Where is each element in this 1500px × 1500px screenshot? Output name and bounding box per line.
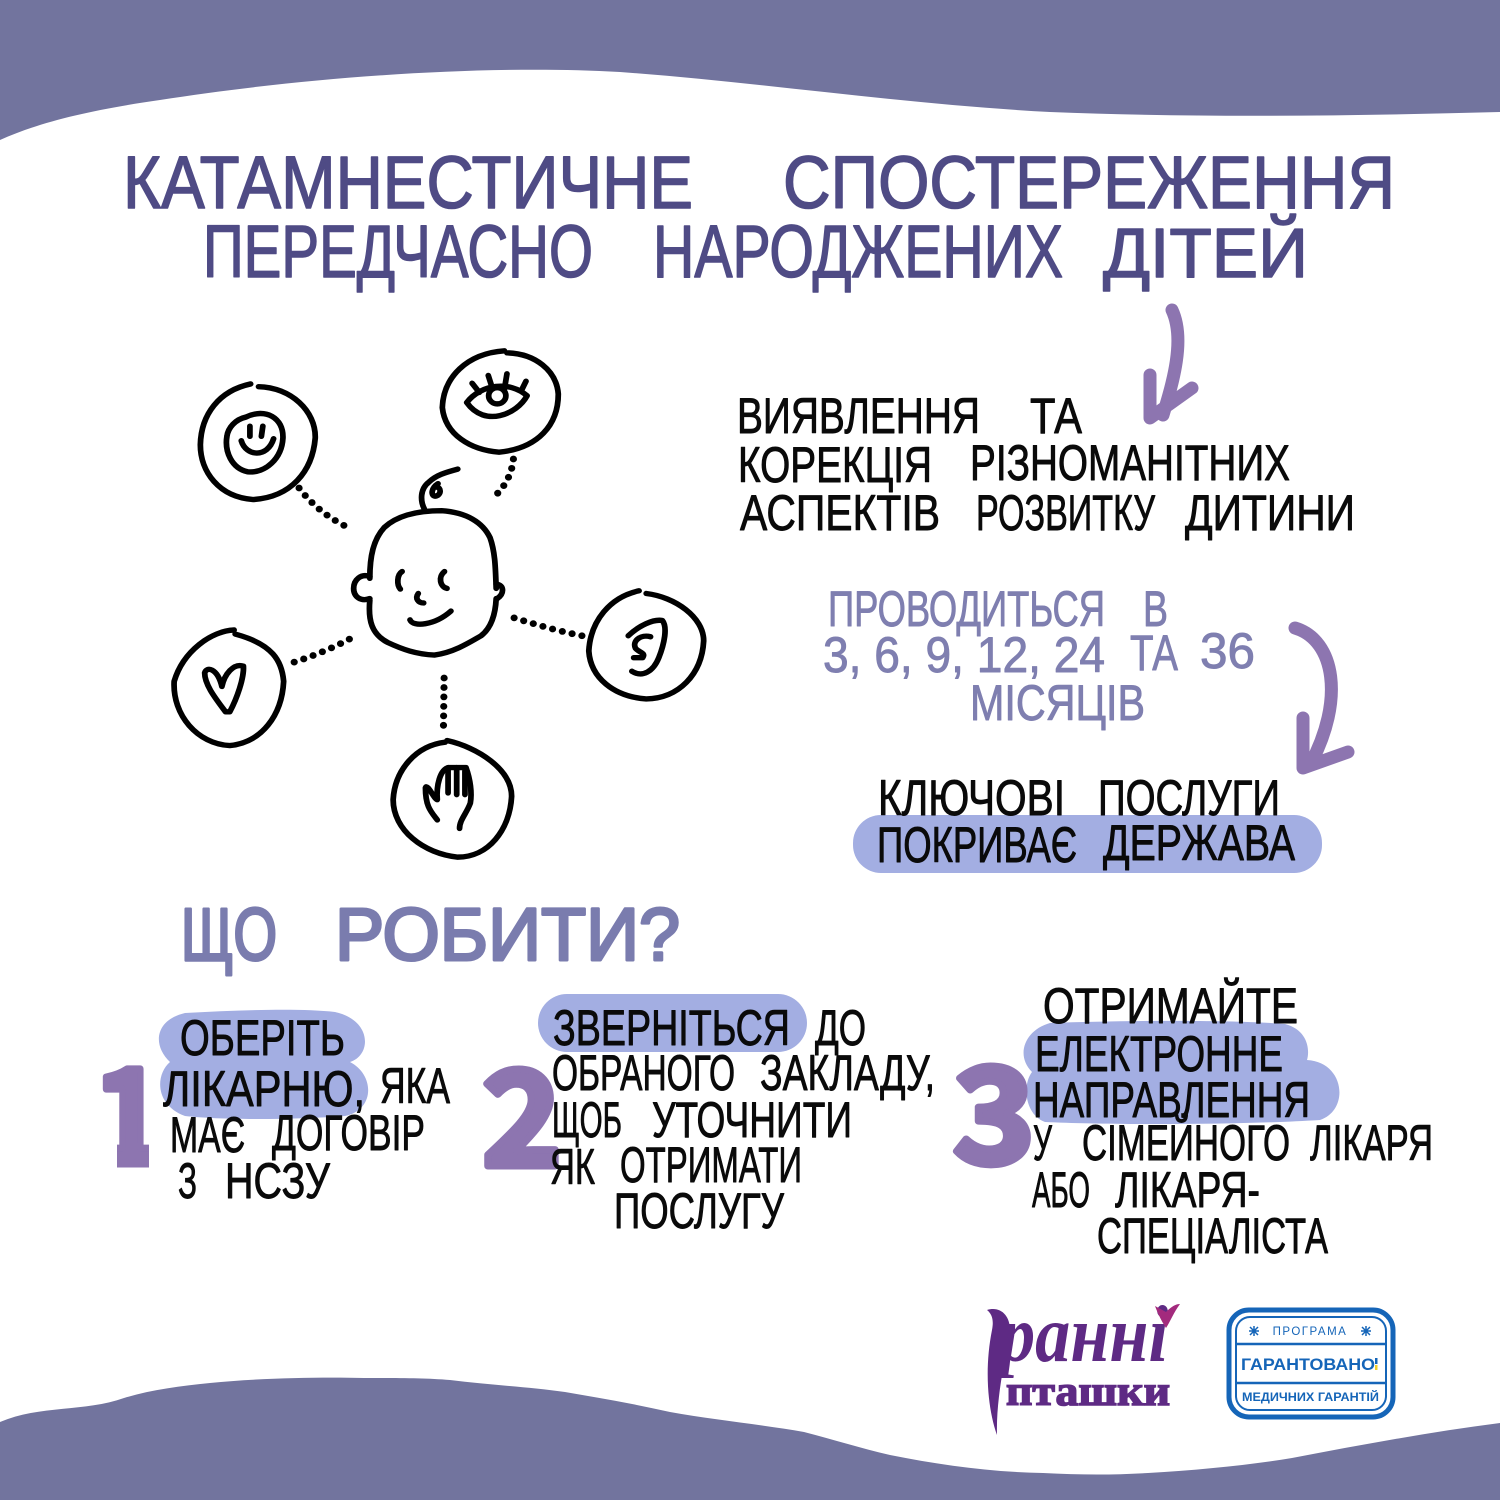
title: СПОСТЕРЕЖЕННЯ bbox=[783, 141, 1395, 224]
text: key services: КЛЮЧОВІ bbox=[878, 770, 1065, 826]
text: step 3: У bbox=[1033, 1115, 1052, 1171]
text: step 3 bbox=[1032, 977, 1433, 1264]
logo: Ранні пташки: ранні bbox=[995, 1291, 1168, 1379]
text: detection and correction: ДИТИНИ bbox=[1185, 485, 1355, 541]
text: schedule: ТА bbox=[1130, 625, 1178, 681]
text: step 1: З bbox=[178, 1153, 197, 1209]
text: step 3: СПЕЦІАЛІСТА bbox=[1097, 1208, 1328, 1264]
heading: what to do: РОБИТИ? bbox=[335, 893, 680, 976]
text: detection and correction: АСПЕКТІВ bbox=[740, 485, 940, 541]
heading: what to do bbox=[181, 893, 680, 976]
step 3 bbox=[953, 977, 1433, 1264]
text: step 1: ЛІКАРНЮ, bbox=[163, 1061, 365, 1117]
text: key services: ПОКРИВАЄ bbox=[877, 817, 1077, 873]
dotted connectors bbox=[289, 459, 587, 731]
text: step 2: УТОЧНИТИ bbox=[652, 1092, 852, 1148]
text: key services bbox=[877, 770, 1296, 873]
title: ПЕРЕДЧАСНО bbox=[203, 210, 593, 293]
text: detection and correction: РІЗНОМАНІТНИХ bbox=[970, 435, 1290, 491]
text: detection and correction: КОРЕКЦІЯ bbox=[738, 437, 932, 493]
title: ДІТЕЙ bbox=[1103, 213, 1308, 292]
top wave band bbox=[0, 0, 1500, 140]
text: step 2: ОБРАНОГО bbox=[552, 1045, 735, 1101]
text: step 1: ДОГОВІР bbox=[272, 1105, 425, 1161]
highlight: step 3 bbox=[1024, 1021, 1339, 1124]
title: КАТАМНЕСТИЧНЕ bbox=[123, 141, 693, 224]
heading: what to do: ЩО bbox=[181, 893, 277, 976]
text: detection and correction bbox=[737, 388, 1355, 541]
icon: heart bbox=[174, 630, 284, 746]
text: step 2 bbox=[550, 1000, 935, 1239]
arrow: to detection text bbox=[1150, 310, 1192, 418]
text: step 1: МАЄ bbox=[170, 1107, 245, 1163]
text: schedule: 36 bbox=[1200, 623, 1255, 679]
highlight: step 1 bbox=[159, 1010, 368, 1119]
text: step 2: ЗАКЛАДУ, bbox=[760, 1045, 935, 1101]
text: step 1: НСЗУ bbox=[225, 1153, 330, 1209]
text: step 1: ЯКА bbox=[380, 1058, 450, 1114]
text: step 1 bbox=[163, 1010, 450, 1209]
stamp: program of medical guarantees: МЕДИЧНИХ ГАРАНТІЙ bbox=[1242, 1391, 1379, 1404]
arrow: to key services bbox=[1295, 628, 1348, 768]
text: step 3: СІМЕЙНОГО bbox=[1082, 1114, 1290, 1171]
text: schedule: 3, 6, 9, 12, 24 bbox=[823, 627, 1105, 683]
text: step 2: ДО bbox=[815, 1000, 866, 1056]
step 1 bbox=[93, 1010, 450, 1209]
number 1: 1 bbox=[93, 1012, 165, 1203]
text: step 2: ПОСЛУГУ bbox=[614, 1183, 784, 1239]
text: detection and correction: ВИЯВЛЕННЯ bbox=[737, 388, 980, 444]
highlight: state coverage bbox=[853, 815, 1322, 873]
icon: ear bbox=[589, 591, 704, 699]
icon: smile bbox=[200, 384, 315, 500]
text: schedule bbox=[823, 581, 1255, 731]
highlight: step 2 bbox=[538, 994, 807, 1052]
stamp: program of medical guarantees: ПРОГРАМА bbox=[1273, 1326, 1347, 1338]
text: key services: ПОСЛУГИ bbox=[1098, 770, 1280, 826]
diagram: baby and development aspects bbox=[174, 351, 704, 857]
icon: eye bbox=[442, 351, 558, 452]
text: schedule: МІСЯЦІВ bbox=[970, 675, 1145, 731]
text: step 3: ОТРИМАЙТЕ bbox=[1043, 977, 1298, 1034]
text: key services: ДЕРЖАВА bbox=[1103, 815, 1296, 871]
text: schedule: В bbox=[1143, 581, 1168, 637]
title bbox=[123, 141, 1395, 293]
text: schedule: ПРОВОДИТЬСЯ bbox=[828, 581, 1105, 637]
number 3: 3 bbox=[953, 1011, 1035, 1202]
text: step 3: ЕЛЕКТРОННЕ bbox=[1035, 1026, 1283, 1082]
text: step 2: ЯК bbox=[550, 1139, 595, 1195]
bottom wave band bbox=[0, 1378, 1500, 1500]
text: step 3: ЛІКАРЯ bbox=[1310, 1115, 1433, 1171]
text: step 3: НАПРАВЛЕННЯ bbox=[1033, 1072, 1310, 1128]
stamp: program of medical guarantees bbox=[1229, 1310, 1393, 1417]
text: step 1: ОБЕРІТЬ bbox=[180, 1010, 345, 1066]
icon: baby face bbox=[354, 469, 503, 655]
text: detection and correction: ТА bbox=[1030, 388, 1083, 444]
logo: Ранні пташки bbox=[987, 1291, 1180, 1435]
text: step 2: ЗВЕРНІТЬСЯ bbox=[553, 1000, 790, 1056]
text: step 3: ЛІКАРЯ- bbox=[1115, 1162, 1260, 1218]
step 2 bbox=[482, 994, 935, 1239]
title: НАРОДЖЕНИХ bbox=[653, 210, 1063, 293]
text: step 3: АБО bbox=[1032, 1162, 1090, 1218]
text: step 2: ЩОБ bbox=[552, 1092, 622, 1148]
number 2: 2 bbox=[482, 1014, 562, 1205]
text: detection and correction: РОЗВИТКУ bbox=[976, 485, 1155, 541]
logo: Ранні пташки: пташки bbox=[1006, 1369, 1170, 1415]
stamp: program of medical guarantees: ГАРАНТОВАНО bbox=[1241, 1355, 1375, 1374]
text: step 2: ОТРИМАТИ bbox=[620, 1137, 802, 1193]
icon: hand bbox=[393, 741, 512, 857]
